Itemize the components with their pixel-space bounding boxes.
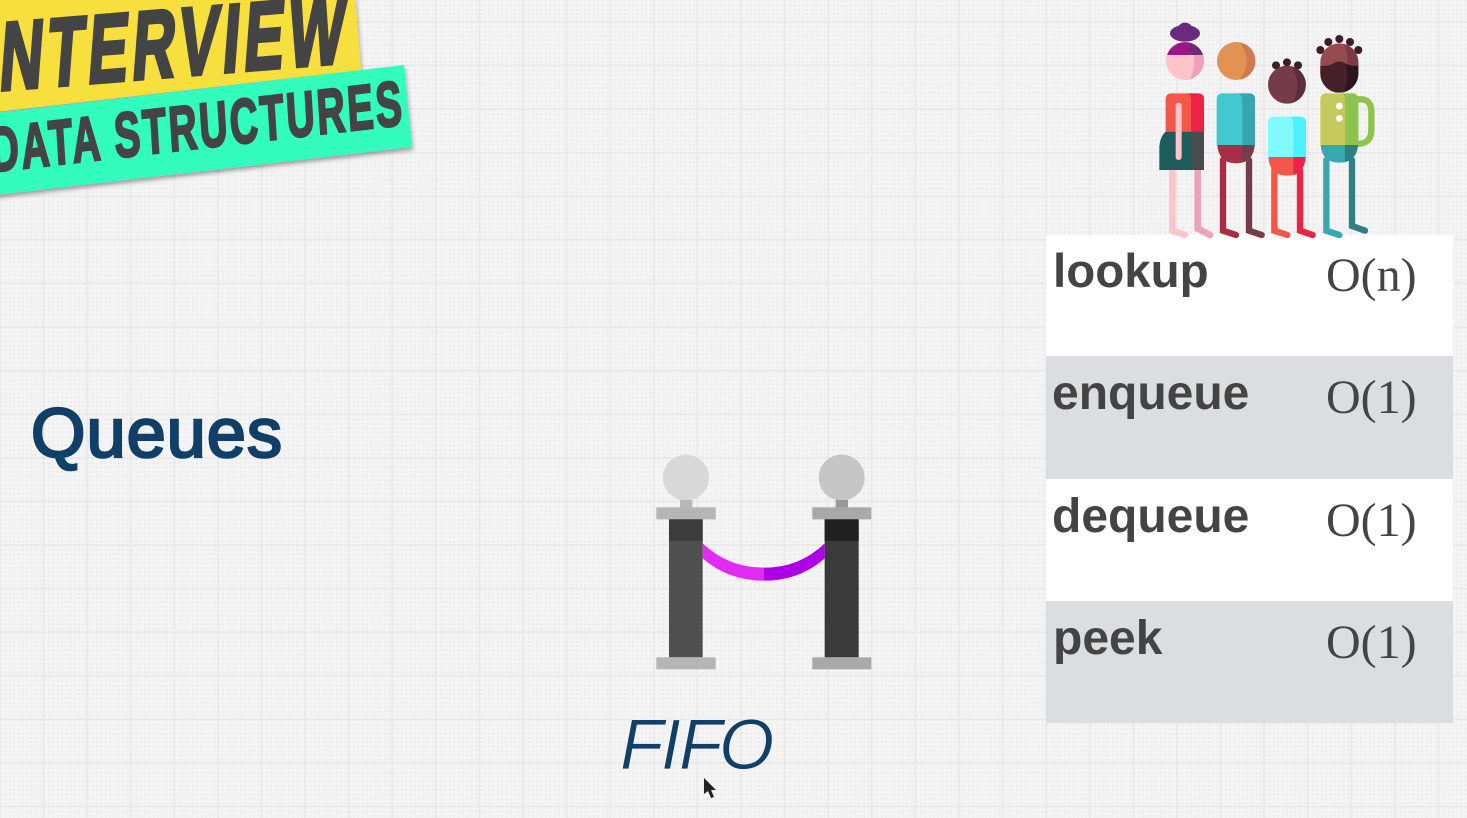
person 3 (1268, 58, 1313, 235)
row: lookup (1053, 245, 1417, 302)
person 1 (1159, 23, 1210, 235)
row: peek: peek (1053, 612, 1163, 665)
row: dequeue: O(1) (1326, 494, 1417, 547)
icon: mouse cursor (704, 778, 716, 798)
icon: rope barrier stanchions (656, 455, 871, 669)
row: lookup: lookup (1053, 245, 1209, 298)
person 2 (1217, 42, 1262, 235)
heading: Queues: Queues (31, 394, 282, 472)
row: lookup: O(n) (1326, 249, 1417, 302)
label: FIFO: FIFO (620, 706, 774, 785)
row: enqueue (1052, 367, 1417, 424)
row: enqueue: O(1) (1326, 371, 1417, 424)
icon: people standing in a queue (1159, 23, 1371, 235)
banner: interview (yellow) (0, 0, 361, 114)
row: peek: O(1) (1326, 616, 1417, 669)
row: dequeue: dequeue (1052, 490, 1249, 543)
person 4 (1316, 35, 1371, 235)
row: enqueue: enqueue (1052, 367, 1249, 420)
table: queue operation complexity (1046, 235, 1453, 723)
row: peek (1053, 612, 1417, 669)
row: dequeue (1052, 490, 1417, 547)
banner: data structures (teal) (0, 65, 412, 195)
banner text: DATA STRUCTURES: DATA STRUCTURES (0, 69, 406, 186)
